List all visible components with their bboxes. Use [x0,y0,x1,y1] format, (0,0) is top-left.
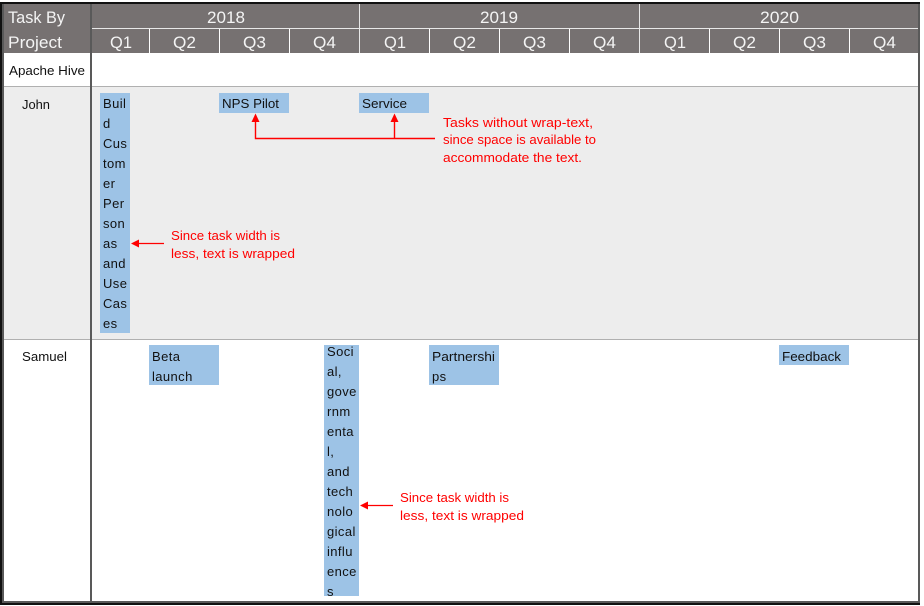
task: Build Customer Personas and Use Cases: Cas [103,296,127,311]
header row: Q2 [173,33,196,52]
header row: Q1 [384,33,406,52]
task: Social, governmental, and technological influences: influ [327,544,353,559]
task: Build Customer Personas and Use Cases: es [103,316,118,331]
header row: 2020 [760,8,799,27]
header row: Task By [8,8,65,27]
header row: Q4 [313,33,336,52]
callout: text wrapped, Samuel [400,490,524,523]
row label: John: John [22,97,50,112]
task: Social, governmental, and technological influences [324,344,359,599]
task: Build Customer Personas and Use Cases: as [103,236,118,251]
task: Build Customer Personas and Use Cases: son [103,216,125,231]
header row: Q1 [110,33,132,52]
callout: text wrapped, John: less, text is wrapped [171,246,295,261]
header row: Q2 [453,33,476,52]
task: Build Customer Personas and Use Cases: d [103,116,111,131]
header row [4,4,918,53]
task: Service: Service [362,96,407,111]
header row: Project [8,33,62,52]
arrow: connector to NPS Pilot and Service [252,114,435,138]
task: Feedback: Feedback [782,349,842,364]
row label: Samuel: Samuel [22,349,67,364]
callout: tasks without wrap-text: Tasks without wrap-text, [443,115,593,130]
header row: 2019 [480,8,518,27]
task: Build Customer Personas and Use Cases: tom [103,156,126,171]
task: Build Customer Personas and Use Cases: Per [103,196,125,211]
task: Beta launch [149,345,219,385]
task: Partnerships: Partnershi [432,349,495,364]
callout: tasks without wrap-text: since space is available to [443,132,596,147]
task: Social, governmental, and technological influences: al, [327,364,342,379]
task: Beta launch: Beta [152,349,181,364]
task: Social, governmental, and technological influences: rnm [327,404,351,419]
task: Social, governmental, and technological influences: l, [327,444,334,459]
task: Social, governmental, and technological influences: gove [327,384,357,399]
task: Build Customer Personas and Use Cases: Buil [103,96,126,111]
task: Build Customer Personas and Use Cases: Cus [103,136,127,151]
arrow: to Build Customer task [131,240,164,248]
header row: 2018 [207,8,245,27]
callout: text wrapped, Samuel: Since task width is [400,490,510,505]
task: Partnerships [429,345,499,385]
task: Partnerships: ps [432,369,447,384]
callout: tasks without wrap-text: accommodate the text. [443,150,582,165]
callout: text wrapped, John: Since task width is [171,228,281,243]
header row: Q3 [803,33,826,52]
task: Build Customer Personas and Use Cases: er [103,176,116,191]
callout: text wrapped, John [171,228,295,261]
task: Social, governmental, and technological influences: s [327,584,334,599]
header row: Q4 [593,33,616,52]
task: Social, governmental, and technological influences: ence [327,564,357,579]
task: Social, governmental, and technological influences: nolo [327,504,353,519]
callout: tasks without wrap-text [443,115,596,165]
header row: Q1 [664,33,686,52]
task: Social, governmental, and technological influences: and [327,464,350,479]
task: Build Customer Personas and Use Cases [100,93,130,333]
task: Social, governmental, and technological influences: enta [327,424,354,439]
header row: Q3 [243,33,266,52]
task: Social, governmental, and technological influences: gical [327,524,356,539]
header row: Q2 [733,33,756,52]
task: Social, governmental, and technological influences: Soci [327,344,354,359]
task: Build Customer Personas and Use Cases: and [103,256,126,271]
task: NPS Pilot: NPS Pilot [222,96,279,111]
task: Build Customer Personas and Use Cases: Use [103,276,127,291]
header row: Q4 [873,33,896,52]
task: Service [359,93,429,113]
task: Feedback [779,345,849,365]
row label: Apache Hive: Apache Hive [9,63,85,78]
task: Social, governmental, and technological influences: tech [327,484,353,499]
arrow: to Social task [360,502,393,510]
task: Beta launch: launch [152,369,193,384]
callout: text wrapped, Samuel: less, text is wrapped [400,508,524,523]
task: NPS Pilot [219,93,289,113]
header row: Q3 [523,33,546,52]
